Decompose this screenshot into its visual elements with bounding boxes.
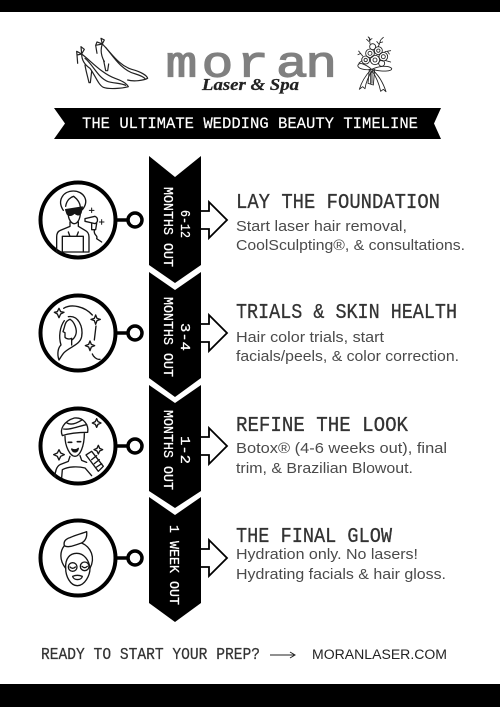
timeline step 4 chevron: 1 week out <box>149 497 201 622</box>
footer call to action: READY TO START YOUR PREP? <box>41 646 260 665</box>
logo: Laser & Spa: Laser & Spa <box>201 75 300 94</box>
timeline step 1 chevron: 6-12 months out: 6-12 <box>176 210 191 238</box>
timeline step 2 chevron: 3-4 months out <box>149 272 201 397</box>
icon: wedding shoes <box>77 38 148 89</box>
step 2 text <box>236 302 459 365</box>
logo: moran: moran <box>166 40 337 90</box>
timeline step 2 chevron: 3-4 months out: 3-4 <box>176 323 191 351</box>
step 3 text: trim, & Brazilian Blowout. <box>236 460 413 477</box>
arrow: step 1 <box>201 202 227 238</box>
step 1 badge: laser treatment icon <box>40 182 142 258</box>
step 3 text <box>236 415 447 477</box>
title banner: THE ULTIMATE WEDDING BEAUTY TIMELINE <box>82 115 418 133</box>
step 4 text: Hydrating facials & hair gloss. <box>236 566 446 583</box>
timeline step 1 chevron: 6-12 months out <box>149 156 201 283</box>
bottom black bar <box>0 684 500 707</box>
timeline step 4 chevron: 1 week out: 1 WEEK OUT <box>165 525 180 605</box>
arrow: step 4 <box>201 540 227 576</box>
timeline step 1 chevron: 6-12 months out: MONTHS OUT <box>159 187 174 267</box>
timeline step 3 chevron: 1-2 months out: MONTHS OUT <box>159 410 174 490</box>
step 4 text: Hydration only. No lasers! <box>236 546 418 563</box>
timeline step 3 chevron: 1-2 months out <box>149 385 201 508</box>
step 3 badge: turban facial icon <box>40 408 142 484</box>
step 3 text: REFINE THE LOOK <box>236 415 408 438</box>
arrow: step 2 <box>201 315 227 351</box>
step 2 text: Hair color trials, start <box>236 329 385 346</box>
step 2 text: facials/peels, & color correction. <box>236 348 459 365</box>
icon: bouquet <box>358 37 392 92</box>
step 2 badge: hair profile icon <box>40 296 142 370</box>
step 1 text: LAY THE FOUNDATION <box>236 192 440 215</box>
arrow: footer <box>270 652 295 658</box>
step 4 text <box>236 526 446 583</box>
timeline step 2 chevron: 3-4 months out: MONTHS OUT <box>159 297 174 377</box>
step 1 text <box>236 192 465 254</box>
timeline step 3 chevron: 1-2 months out: 1-2 <box>176 436 191 464</box>
step 2 text: TRIALS & SKIN HEALTH <box>236 302 457 325</box>
step 1 text: Start laser hair removal, <box>236 218 407 235</box>
top black bar <box>0 0 500 12</box>
step 3 text: Botox® (4-6 weeks out), final <box>236 440 447 457</box>
step 1 text: CoolSculpting®, & consultations. <box>236 237 465 254</box>
step 4 badge: face mask icon <box>40 520 142 596</box>
title banner <box>54 108 441 139</box>
arrow: step 3 <box>201 428 227 464</box>
step 4 text: THE FINAL GLOW <box>236 526 392 549</box>
footer website: MORANLASER.COM <box>312 647 447 662</box>
